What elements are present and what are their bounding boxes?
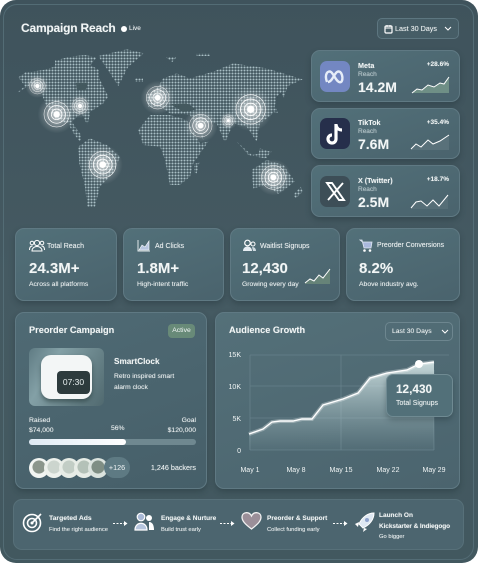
- status badge: [168, 324, 195, 338]
- stat card: preorder conversions: 8.2%: [359, 260, 393, 277]
- stat card: waitlist signups: 12,430: [242, 260, 288, 277]
- dropdown: Last 30 Days: [392, 328, 432, 335]
- tooltip: Total Signups: [396, 400, 438, 407]
- stat card: preorder conversions: [346, 228, 460, 301]
- stat card: total reach: [15, 228, 117, 301]
- date range dropdown: [377, 18, 459, 39]
- area chart: May 8: [286, 467, 306, 474]
- panel: audience growth: [215, 312, 460, 489]
- area chart: [229, 352, 449, 474]
- arrow: [220, 521, 234, 526]
- step: engage and nurture: Engage & Nurture: [161, 515, 216, 522]
- area chart: May 1: [240, 467, 260, 474]
- platform card: X: 2.5M: [358, 194, 389, 210]
- stat card: waitlist signups: Growing every day: [242, 281, 299, 288]
- stat card: ad clicks: 1.8M+: [137, 260, 179, 277]
- product info: SmartClock: [114, 357, 160, 366]
- icon: people: [134, 512, 154, 531]
- area chart: 15K: [229, 352, 241, 359]
- step: preorder and support: Preorder & Support: [267, 515, 327, 522]
- icon: chart: [138, 240, 150, 252]
- platform card: TikTok: 7.6M: [358, 136, 389, 152]
- live indicator: Live: [129, 25, 141, 32]
- icon: heart: [241, 512, 262, 530]
- tooltip: [386, 374, 453, 417]
- sparkline: [304, 268, 330, 284]
- platform card: Meta: Reach: [358, 71, 377, 78]
- step: launch: [355, 512, 450, 540]
- stat card: waitlist signups: [230, 228, 340, 301]
- stat card: ad clicks: [123, 228, 224, 301]
- step: preorder and support: [241, 512, 328, 533]
- stat card: preorder conversions: Above industry avg.: [359, 281, 419, 288]
- icon: cart: [359, 240, 372, 252]
- step: launch: Launch On: [379, 512, 413, 519]
- stat card: waitlist signups: Waitlist Signups: [260, 243, 310, 250]
- area chart: 5K: [232, 416, 241, 423]
- area chart: May 22: [377, 467, 400, 474]
- icon: x: [320, 176, 350, 207]
- stat card: total reach: Across all platforms: [29, 281, 88, 288]
- live indicator: [121, 25, 141, 32]
- platform card: X: [311, 165, 460, 217]
- platform card: TikTok: [311, 108, 460, 159]
- platform card: X: X (Twitter): [358, 176, 393, 185]
- platform card: X: +18.7%: [427, 176, 449, 183]
- step: targeted ads: Targeted Ads: [49, 515, 92, 522]
- title: Campaign Reach: [21, 21, 116, 35]
- icon: target: [22, 513, 42, 532]
- step: launch: Go bigger: [379, 534, 404, 540]
- area chart: 10K: [229, 384, 241, 391]
- funding progress: $74,000: [29, 427, 54, 434]
- heading: Audience Growth: [229, 325, 305, 335]
- platform card: Meta: 14.2M: [358, 79, 397, 95]
- icon: people: [29, 240, 45, 252]
- step: targeted ads: Find the right audience: [49, 527, 108, 533]
- stat card: total reach: Total Reach: [47, 243, 84, 250]
- world map: [18, 49, 302, 206]
- funding progress: $120,000: [168, 427, 196, 434]
- backers: +126: [109, 463, 125, 472]
- arrow: [333, 521, 348, 526]
- step: launch: Kickstarter & Indiegogo: [379, 523, 450, 530]
- stat card: ad clicks: High-intent traffic: [137, 281, 188, 288]
- step: preorder and support: Collect funding early: [267, 527, 320, 533]
- platform card: TikTok: Reach: [358, 128, 377, 135]
- dropdown: [385, 322, 453, 341]
- area chart: 0: [237, 448, 241, 455]
- funding progress: [29, 417, 196, 445]
- area chart: May 29: [423, 467, 446, 474]
- platform card: Meta: [311, 50, 460, 102]
- stat card: ad clicks: Ad Clicks: [155, 243, 184, 250]
- panel: preorder campaign: [15, 312, 207, 489]
- product image: smart clock: 07:30: [63, 377, 84, 387]
- date range dropdown: Last 30 Days: [395, 24, 437, 33]
- icon: meta: [320, 61, 350, 92]
- tooltip: 12,430: [396, 382, 432, 396]
- heading: Preorder Campaign: [29, 325, 114, 335]
- arrow: [113, 521, 128, 526]
- backers: [29, 457, 196, 478]
- platform card: Meta: +28.6%: [427, 61, 449, 68]
- panel: preorder campaign: alarm clock: [114, 384, 148, 390]
- stat card: total reach: 24.3M+: [29, 260, 79, 277]
- panel: funnel steps: [13, 499, 464, 550]
- platform card: TikTok: +35.4%: [427, 119, 449, 126]
- platform card: Meta: Meta: [358, 61, 374, 70]
- stat card: preorder conversions: Preorder Conversions: [377, 242, 444, 249]
- panel: preorder campaign: Retro inspired smart: [114, 373, 174, 380]
- step: engage and nurture: Build trust early: [161, 527, 201, 533]
- icon: users: [243, 240, 256, 251]
- step: targeted ads: [22, 513, 108, 533]
- step: engage and nurture: [134, 512, 216, 533]
- platform card: X: Reach: [358, 186, 377, 193]
- icon: rocket: [355, 512, 374, 532]
- icon: tiktok: [320, 118, 350, 149]
- platform card: TikTok: TikTok: [358, 118, 380, 127]
- backers: 1,246 backers: [151, 463, 196, 472]
- funding progress: Raised: [29, 417, 50, 424]
- funding progress: Goal: [182, 417, 196, 424]
- area chart: May 15: [330, 467, 353, 474]
- funding progress: 56%: [111, 425, 125, 432]
- product image: smart clock: [29, 348, 104, 406]
- status badge: Active: [172, 327, 191, 334]
